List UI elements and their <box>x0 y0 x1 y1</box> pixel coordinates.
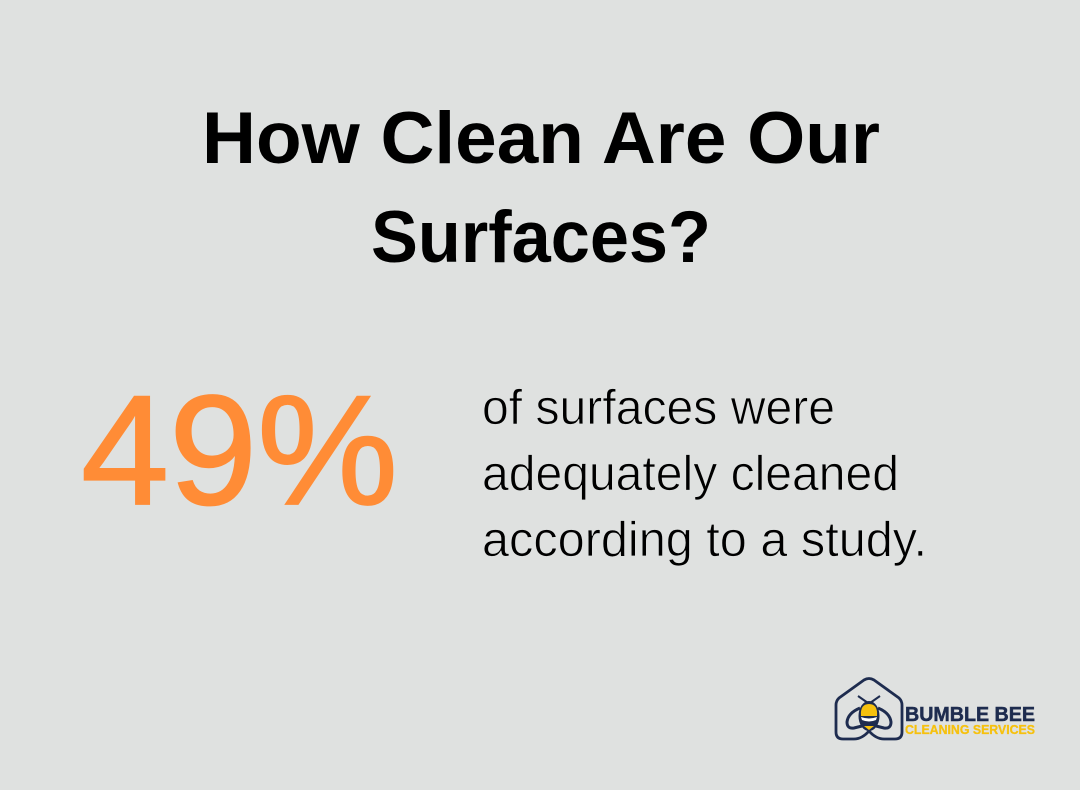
title: How Clean Are Our <box>202 98 880 179</box>
logo: Bumble Bee Cleaning Services <box>836 678 1035 739</box>
big statistic: 49%: 49% <box>81 364 398 538</box>
description text: of surfaces were <box>482 381 835 435</box>
icon: house with bee <box>836 678 902 739</box>
logo wordmark: BUMBLE BEE <box>905 703 1035 726</box>
title: Surfaces? <box>371 197 711 278</box>
title <box>202 98 880 278</box>
description text: according to a study. <box>482 513 927 567</box>
description text <box>482 381 927 567</box>
logo tagline: CLEANING SERVICES <box>905 723 1035 737</box>
description text: adequately cleaned <box>482 447 899 501</box>
